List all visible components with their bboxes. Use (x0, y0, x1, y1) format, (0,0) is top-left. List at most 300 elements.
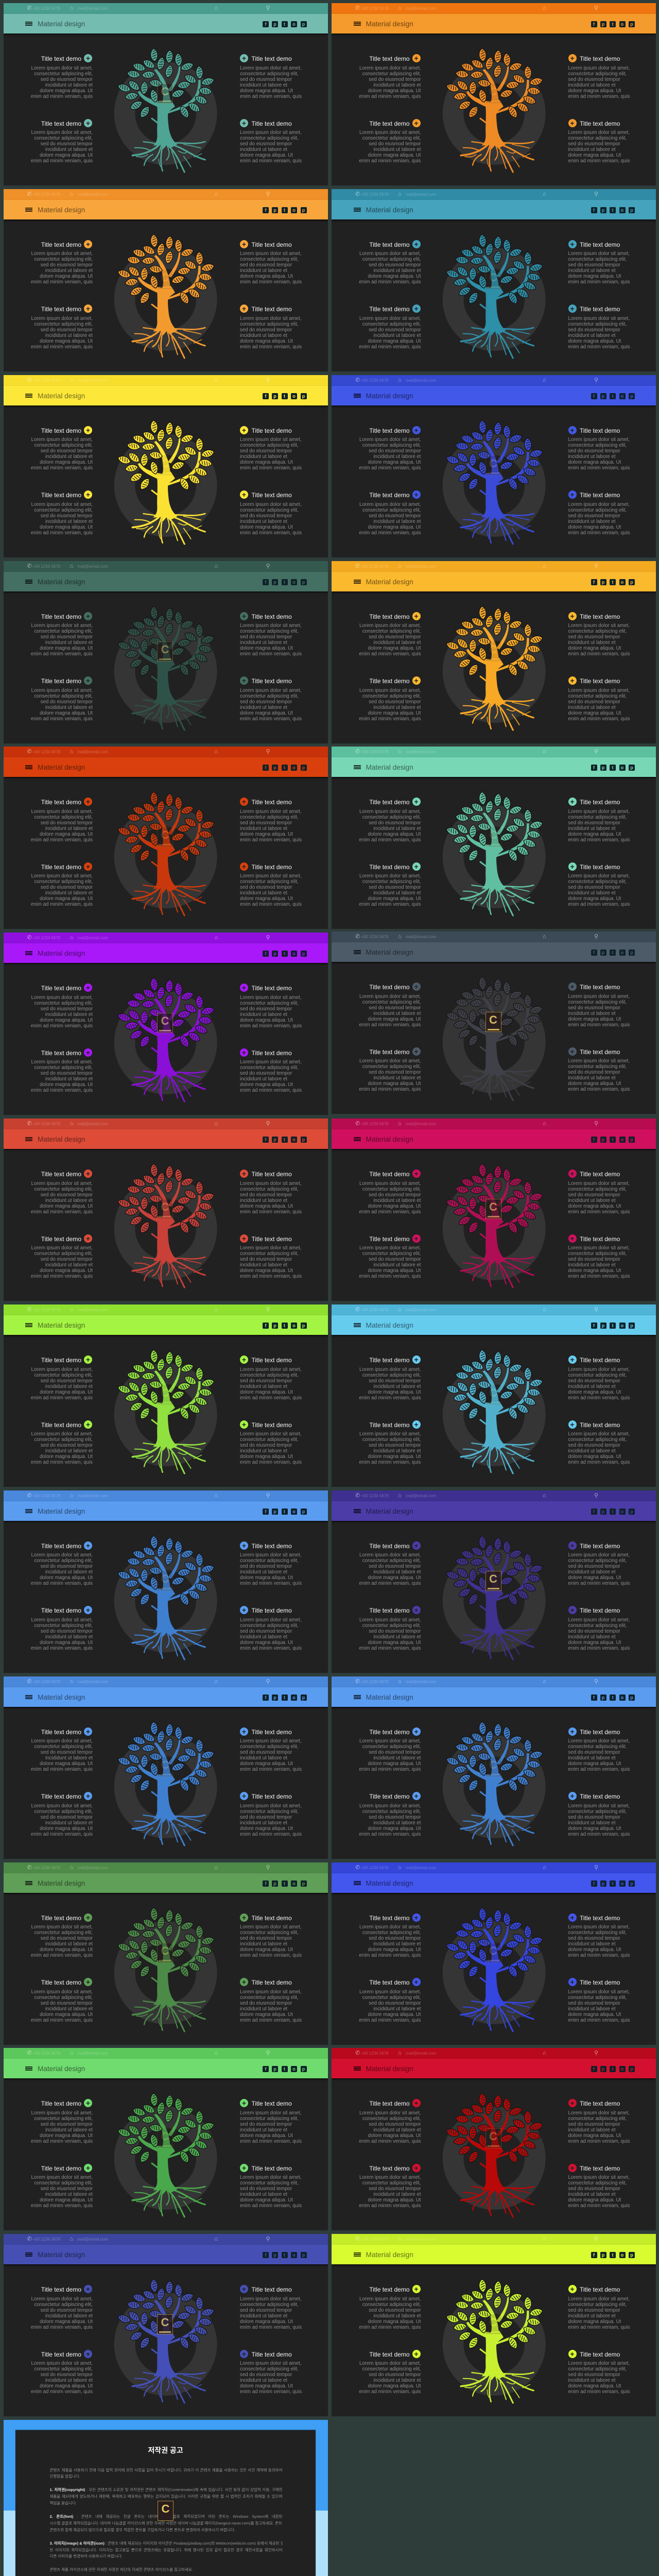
nav bar: p (273, 22, 276, 27)
text block: incididunt ut labore et (240, 2127, 287, 2133)
text block: dolore magna aliqua. Ut (240, 1082, 293, 1088)
top bar: ⌂ (398, 2050, 402, 2056)
text block (349, 1421, 421, 1468)
text block: Lorem ipsum dolor sit amet, (31, 1803, 93, 1809)
text block: consectetur adipiscing elit, (362, 999, 421, 1005)
text block: + (414, 490, 419, 499)
top bar: ⌂ (398, 1864, 402, 1870)
nav bar (332, 572, 656, 591)
text block (31, 304, 93, 350)
text block: Lorem ipsum dolor sit amet, (359, 1924, 421, 1930)
text block: Title text demo (369, 677, 410, 685)
top bar: ⌂ (70, 1864, 73, 1870)
text block: consectetur adipiscing elit, (240, 1251, 299, 1257)
top bar: ⌂ (70, 5, 73, 11)
badge: C (489, 2130, 497, 2143)
top bar: ⌂ (398, 5, 402, 11)
text block: incididunt ut labore et (373, 826, 421, 832)
text block (240, 54, 302, 99)
badge: C (489, 1013, 497, 1026)
top bar: ⚲ (594, 1679, 598, 1685)
text block: + (414, 676, 419, 685)
text block: sed do eiusmod tempor (41, 1257, 93, 1262)
top bar (332, 3, 656, 14)
text block: Lorem ipsum dolor sit amet, (359, 2175, 421, 2180)
text block: + (86, 2349, 90, 2358)
text block: Title text demo (41, 306, 81, 313)
text block: + (414, 1047, 419, 1055)
badge (485, 2314, 501, 2334)
top bar: ⚲ (266, 2236, 270, 2242)
badge (157, 83, 173, 104)
text block: incididunt ut labore et (45, 1384, 93, 1389)
text block: consectetur adipiscing elit, (34, 1372, 93, 1378)
top bar (332, 1118, 656, 1129)
text block: enim ad minim veniam, quis (359, 465, 421, 471)
text block: Lorem ipsum dolor sit amet, (240, 1181, 302, 1187)
text block: incididunt ut labore et (568, 1941, 616, 1947)
text block: Lorem ipsum dolor sit amet, (568, 1431, 630, 1437)
nav bar: p (273, 1509, 276, 1514)
panel: moss green (3, 1862, 327, 2044)
text block: Lorem ipsum dolor sit amet, (568, 1366, 630, 1372)
text block: Title text demo (580, 2350, 620, 2358)
text block: Title text demo (251, 1979, 292, 1986)
nav bar: f (593, 394, 595, 399)
text block: dolore magna aliqua. Ut (40, 2197, 93, 2203)
text block: enim ad minim veniam, quis (31, 1088, 93, 1093)
text block: incididunt ut labore et (373, 705, 421, 710)
text block: Lorem ipsum dolor sit amet, (31, 688, 93, 693)
text block: + (414, 612, 419, 620)
text block: + (86, 2285, 90, 2293)
text block: sed do eiusmod tempor (568, 327, 620, 333)
text block: Title text demo (41, 1421, 81, 1428)
nav bar: Material design (366, 1136, 413, 1143)
text block: consectetur adipiscing elit, (34, 629, 93, 634)
text block: dolore magna aliqua. Ut (40, 832, 93, 837)
text block: incididunt ut labore et (45, 1941, 93, 1947)
text block: enim ad minim veniam, quis (568, 158, 630, 164)
badge: C (161, 271, 169, 284)
text block: + (570, 2285, 575, 2293)
text block: + (86, 1234, 90, 1243)
text block: consectetur adipiscing elit, (240, 1187, 299, 1192)
top bar: ⚲ (594, 1864, 598, 1870)
top bar: ⌂ (214, 191, 218, 197)
text block: dolore magna aliqua. Ut (368, 1947, 421, 1953)
top bar: +00 1234 5678 (33, 2237, 60, 2242)
text block: sed do eiusmod tempor (369, 1378, 421, 1384)
text block: dolore magna aliqua. Ut (368, 460, 421, 465)
text block: Title text demo (41, 799, 81, 806)
badge: C (161, 457, 169, 470)
text block: Title text demo (369, 1793, 410, 1800)
text block (240, 1421, 307, 1468)
nav bar: p (602, 765, 604, 770)
text block: sed do eiusmod tempor (240, 262, 292, 268)
text block: consectetur adipiscing elit, (240, 1623, 299, 1629)
text block: dolore magna aliqua. Ut (568, 88, 621, 94)
nav bar: Material design (38, 1693, 85, 1701)
text block: dolore magna aliqua. Ut (568, 832, 621, 837)
text block: dolore magna aliqua. Ut (40, 1454, 93, 1460)
text block (568, 1978, 635, 2026)
nav bar: t (284, 2066, 285, 2072)
top bar: ⚲ (266, 377, 270, 383)
top bar: mail@email.com (77, 750, 108, 754)
top bar: ✆ (27, 2050, 32, 2056)
text block: dolore magna aliqua. Ut (568, 274, 621, 279)
text block: enim ad minim veniam, quis (359, 2325, 421, 2330)
text block: Title text demo (251, 1171, 292, 1178)
text block: incididunt ut labore et (568, 1755, 616, 1761)
text block: sed do eiusmod tempor (369, 2307, 421, 2313)
text block: consectetur adipiscing elit, (568, 71, 627, 76)
text block (568, 1606, 635, 1654)
text block: dolore magna aliqua. Ut (240, 1268, 293, 1274)
text block: consectetur adipiscing elit, (34, 1744, 93, 1750)
text block (349, 863, 421, 910)
text block: + (414, 2099, 419, 2107)
text block: sed do eiusmod tempor (240, 1071, 292, 1076)
text block (21, 1421, 93, 1468)
nav bar: p (602, 394, 604, 399)
text block: sed do eiusmod tempor (568, 2372, 620, 2378)
text block: Lorem ipsum dolor sit amet, (31, 1366, 93, 1372)
panel: coral red (3, 1118, 327, 1301)
text block: sed do eiusmod tempor (568, 1192, 620, 1198)
text block: Lorem ipsum dolor sit amet, (31, 2361, 93, 2366)
text block: dolore magna aliqua. Ut (368, 2383, 421, 2389)
top bar: ⌂ (70, 935, 73, 941)
tree illustration (103, 2262, 227, 2416)
nav bar: o (292, 208, 296, 213)
text block (349, 1542, 421, 1589)
text block: incididunt ut labore et (45, 1012, 93, 1018)
text block: dolore magna aliqua. Ut (368, 338, 421, 344)
text block: sed do eiusmod tempor (369, 1564, 421, 1569)
text block: Title text demo (41, 2165, 81, 2172)
text block: sed do eiusmod tempor (41, 2122, 93, 2127)
text block: incididunt ut labore et (45, 2006, 93, 2011)
nav bar: Material design (366, 948, 413, 956)
text block: + (414, 1913, 419, 1922)
nav bar: Material design (38, 578, 85, 586)
text block: + (242, 1913, 246, 1922)
text block: enim ad minim veniam, quis (568, 716, 630, 722)
text block (31, 118, 93, 164)
text block: Lorem ipsum dolor sit amet, (31, 65, 93, 71)
text block: Title text demo (369, 2350, 410, 2358)
text block: incididunt ut labore et (45, 1634, 93, 1640)
badge: C (161, 1014, 169, 1027)
copyright text: 다른 이미지를 변경하여 사용하시기 바랍니다. (49, 2554, 123, 2558)
text block: enim ad minim veniam, quis (31, 1646, 93, 1651)
text block: Lorem ipsum dolor sit amet, (240, 1245, 302, 1251)
text block: Title text demo (580, 1235, 620, 1243)
text block: Title text demo (41, 1979, 81, 1986)
text block: consectetur adipiscing elit, (568, 1187, 627, 1192)
nav bar: p (302, 580, 305, 585)
nav bar: p (273, 208, 276, 213)
nav bar: t (284, 951, 285, 956)
badge: C (161, 2130, 169, 2143)
top bar: ⌂ (214, 563, 218, 569)
text block: Title text demo (251, 55, 292, 62)
nav bar (332, 14, 656, 33)
text block: consectetur adipiscing elit, (34, 1187, 93, 1192)
badge (157, 455, 173, 476)
text block: sed do eiusmod tempor (568, 820, 620, 826)
text block: consectetur adipiscing elit, (362, 71, 421, 76)
top bar: +00 1234 5678 (361, 564, 389, 569)
nav bar (3, 386, 327, 405)
text block: enim ad minim veniam, quis (359, 2139, 421, 2144)
copyright text: 책임을 묻습니다. (49, 2501, 77, 2505)
text block: consectetur adipiscing elit, (362, 1995, 421, 2000)
text block: dolore magna aliqua. Ut (240, 524, 293, 530)
text block: enim ad minim veniam, quis (568, 1087, 630, 1092)
badge (485, 1199, 501, 1219)
top bar: ✆ (355, 191, 360, 197)
badge (157, 827, 173, 847)
nav bar (3, 14, 327, 33)
text block: incididunt ut labore et (45, 890, 93, 896)
text block: dolore magna aliqua. Ut (240, 1389, 293, 1395)
text block: dolore magna aliqua. Ut (568, 2011, 621, 2018)
top bar (332, 561, 656, 572)
text block (240, 798, 307, 845)
text block: enim ad minim veniam, quis (240, 530, 302, 536)
text block: + (414, 2285, 419, 2293)
text block: Title text demo (41, 492, 81, 499)
text block: + (242, 118, 246, 127)
text block: consectetur adipiscing elit, (568, 1372, 627, 1378)
text block: enim ad minim veniam, quis (568, 2203, 630, 2209)
top bar: ⌂ (214, 1679, 218, 1685)
text block: dolore magna aliqua. Ut (40, 274, 93, 279)
top bar: ✆ (27, 2236, 32, 2242)
top bar: ✆ (27, 1121, 32, 1127)
text block: consectetur adipiscing elit, (568, 2180, 627, 2186)
nav bar: o (621, 2252, 623, 2258)
text block: sed do eiusmod tempor (369, 2000, 421, 2006)
text block: + (414, 1170, 419, 1178)
text block (568, 2164, 635, 2212)
text block: + (414, 1541, 419, 1550)
text block: dolore magna aliqua. Ut (240, 1575, 293, 1581)
text block: enim ad minim veniam, quis (240, 1460, 302, 1465)
text block: + (570, 118, 575, 127)
text block: consectetur adipiscing elit, (240, 1065, 299, 1071)
copyright text: 된 이미지와 제작되었습니다. 이미지는 참고용일 뿐으로 콘텐츠에는 포함됩니다. 위에 명시된 것과 같이 필요한 경우 제한사항을 확인하시어 (49, 2548, 282, 2552)
text block: sed do eiusmod tempor (41, 699, 93, 705)
text block: sed do eiusmod tempor (369, 1629, 421, 1634)
nav bar: f (265, 1880, 267, 1886)
text block (359, 240, 421, 285)
text block: incididunt ut labore et (568, 82, 616, 88)
text block: enim ad minim veniam, quis (359, 279, 421, 285)
nav bar (332, 757, 656, 777)
text block: Lorem ipsum dolor sit amet, (359, 1552, 421, 1558)
nav bar: o (621, 950, 623, 955)
nav bar: p (273, 1137, 276, 1142)
top bar: mail@email.com (406, 6, 436, 11)
text block: Title text demo (41, 2286, 81, 2293)
nav bar (3, 1315, 327, 1335)
text block: + (86, 2099, 90, 2107)
text block: Lorem ipsum dolor sit amet, (359, 993, 421, 999)
text block: enim ad minim veniam, quis (568, 902, 630, 907)
text block: Title text demo (251, 799, 292, 806)
text block (21, 1913, 93, 1961)
text block (568, 1235, 635, 1282)
text block: sed do eiusmod tempor (568, 699, 620, 705)
text block: consectetur adipiscing elit, (34, 2116, 93, 2122)
text block: incididunt ut labore et (568, 2378, 616, 2383)
text block: sed do eiusmod tempor (41, 2186, 93, 2192)
text block: consectetur adipiscing elit, (568, 2116, 627, 2122)
heading: 저작권 공고 (148, 2446, 183, 2454)
text block: sed do eiusmod tempor (369, 820, 421, 826)
text block: Title text demo (580, 492, 620, 499)
text block: sed do eiusmod tempor (240, 1815, 292, 1820)
text block: incididunt ut labore et (373, 2192, 421, 2197)
tree illustration (431, 1332, 555, 1487)
top bar: ⌂ (543, 1679, 546, 1685)
text block: Lorem ipsum dolor sit amet, (240, 1989, 302, 1995)
text block: enim ad minim veniam, quis (359, 1646, 421, 1651)
text block: + (86, 1541, 90, 1550)
top bar: +00 1234 5678 (361, 935, 389, 939)
badge (157, 2128, 173, 2148)
text block: sed do eiusmod tempor (568, 1564, 620, 1569)
nav bar: p (273, 580, 276, 585)
text block: incididunt ut labore et (373, 1755, 421, 1761)
text block: enim ad minim veniam, quis (31, 1953, 93, 1958)
top bar: ✆ (355, 563, 360, 569)
text block: enim ad minim veniam, quis (240, 1646, 302, 1651)
top bar: mail@email.com (406, 2237, 436, 2242)
text block: dolore magna aliqua. Ut (368, 152, 421, 158)
text block: sed do eiusmod tempor (41, 1006, 93, 1012)
text block: consectetur adipiscing elit, (362, 1372, 421, 1378)
text block: enim ad minim veniam, quis (240, 1209, 302, 1215)
top bar (332, 1490, 656, 1501)
text block: incididunt ut labore et (45, 826, 93, 832)
text block: dolore magna aliqua. Ut (568, 338, 621, 344)
text block (568, 304, 630, 350)
nav bar: p (602, 950, 604, 955)
text block: enim ad minim veniam, quis (240, 1581, 302, 1586)
text block: Lorem ipsum dolor sit amet, (31, 2296, 93, 2302)
text block: + (570, 1913, 575, 1922)
nav bar: t (284, 1880, 285, 1886)
top bar: ⚲ (594, 749, 598, 755)
top bar: mail@email.com (77, 2051, 108, 2056)
nav bar: o (292, 2252, 296, 2258)
top bar: ✆ (27, 563, 32, 569)
text block: consectetur adipiscing elit, (362, 2302, 421, 2307)
text block: consectetur adipiscing elit, (362, 2180, 421, 2186)
text block: sed do eiusmod tempor (41, 2372, 93, 2378)
text block: sed do eiusmod tempor (369, 699, 421, 705)
tree illustration (443, 420, 546, 545)
text block: dolore magna aliqua. Ut (40, 460, 93, 465)
text block: incididunt ut labore et (568, 147, 616, 152)
nav bar: p (602, 580, 604, 585)
text block (21, 1235, 93, 1282)
text block (240, 2350, 307, 2398)
text block: + (570, 1047, 575, 1055)
text block: Title text demo (41, 55, 81, 62)
text block: + (242, 862, 246, 871)
text block: sed do eiusmod tempor (369, 1257, 421, 1262)
text block: Lorem ipsum dolor sit amet, (568, 1924, 630, 1930)
nav bar: t (284, 765, 285, 770)
text block: Title text demo (251, 1235, 292, 1243)
text block: Lorem ipsum dolor sit amet, (568, 1989, 630, 1995)
text block: dolore magna aliqua. Ut (40, 1389, 93, 1395)
text block: sed do eiusmod tempor (369, 1815, 421, 1820)
text block: Lorem ipsum dolor sit amet, (359, 688, 421, 693)
text block: enim ad minim veniam, quis (359, 1460, 421, 1465)
text block (568, 1048, 635, 1095)
text block (31, 612, 93, 657)
text block: + (242, 676, 246, 685)
panel: red (332, 2048, 656, 2230)
top bar: +00 1234 5678 (33, 936, 60, 940)
text block: Lorem ipsum dolor sit amet, (568, 1738, 630, 1744)
text block: Title text demo (580, 613, 620, 620)
nav bar: p (630, 2252, 633, 2258)
text block: Title text demo (251, 1357, 292, 1364)
text block: Title text demo (580, 2100, 620, 2107)
text block: enim ad minim veniam, quis (568, 1646, 630, 1651)
nav bar: t (284, 1695, 285, 1700)
text block: dolore magna aliqua. Ut (40, 1826, 93, 1832)
text block: sed do eiusmod tempor (41, 1815, 93, 1820)
top bar: +00 1234 5678 (361, 1865, 389, 1870)
text block: Lorem ipsum dolor sit amet, (240, 1431, 302, 1437)
text block: Title text demo (251, 677, 292, 685)
text block: Title text demo (369, 1357, 410, 1364)
text block (240, 1606, 307, 1654)
text block: enim ad minim veniam, quis (568, 1022, 630, 1027)
text block: consectetur adipiscing elit, (34, 1251, 93, 1257)
top bar (3, 2048, 327, 2059)
nav bar (3, 2245, 327, 2264)
top bar: ⌂ (543, 191, 546, 197)
text block: incididunt ut labore et (45, 1198, 93, 1204)
text block: Title text demo (580, 677, 620, 685)
text block (240, 240, 302, 285)
text block: enim ad minim veniam, quis (359, 94, 421, 99)
text block (349, 2350, 421, 2398)
nav bar (332, 1873, 656, 1893)
text block: incididunt ut labore et (568, 826, 616, 832)
text block: incididunt ut labore et (373, 1011, 421, 1016)
badge (485, 641, 501, 662)
badge: C (489, 271, 497, 284)
nav bar: f (265, 765, 267, 770)
text block (349, 1356, 421, 1403)
text block: incididunt ut labore et (240, 640, 287, 646)
badge (485, 827, 501, 847)
text block: incididunt ut labore et (240, 1448, 287, 1454)
text block: Title text demo (580, 1914, 620, 1922)
